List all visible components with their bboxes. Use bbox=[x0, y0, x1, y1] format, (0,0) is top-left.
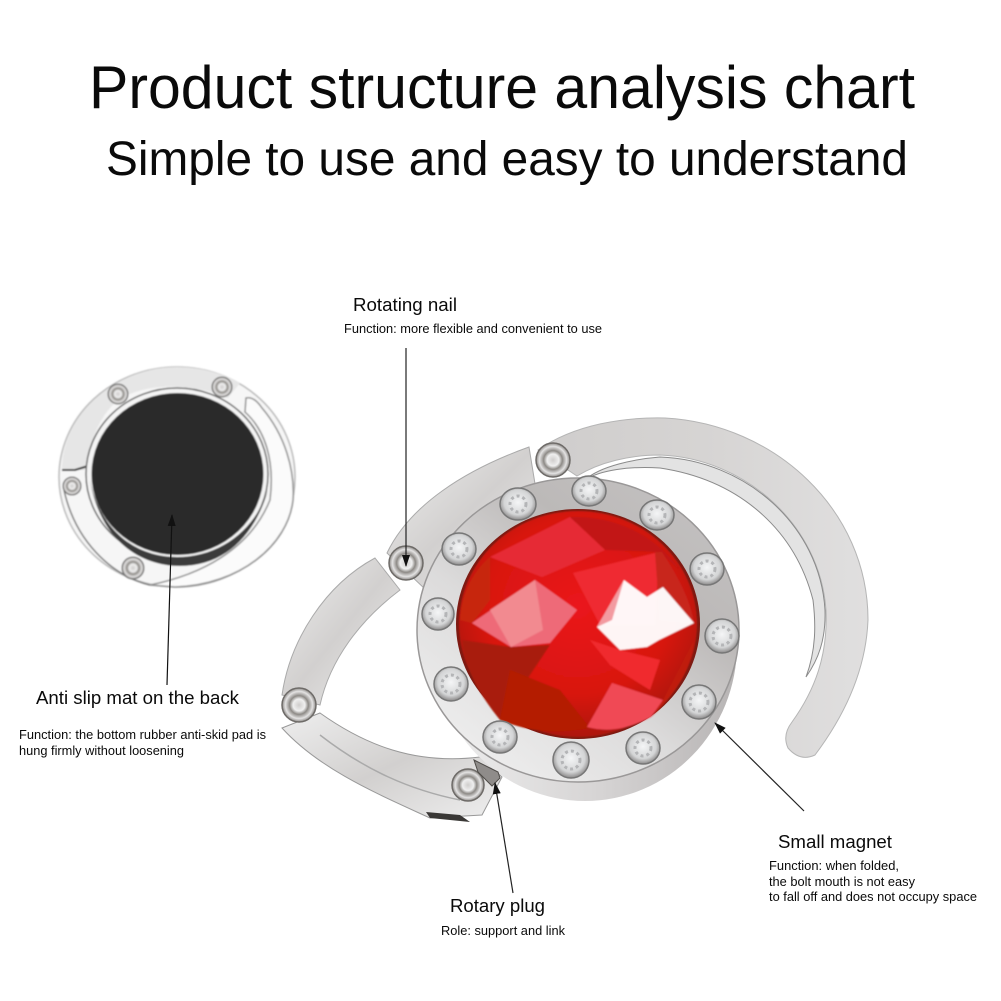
product image: back of closed hook bbox=[59, 367, 295, 587]
rhinestone facets bbox=[430, 483, 731, 769]
gem highlight bbox=[597, 580, 694, 650]
lower band bbox=[282, 713, 502, 818]
title: Product structure analysis chart bbox=[89, 54, 915, 121]
product image: open hook with red jewel bbox=[282, 418, 868, 822]
subtitle: Simple to use and easy to understand bbox=[106, 133, 908, 186]
arrow: rotating nail bbox=[405, 348, 407, 566]
label: rotating nail: Function: more flexible and convenient to use bbox=[344, 322, 602, 336]
label: anti slip mat: hung firmly without loosening bbox=[19, 744, 184, 758]
arrow: rotary plug bbox=[495, 783, 513, 893]
crescent inner side surface bbox=[585, 457, 825, 677]
jewel back body bbox=[433, 489, 737, 801]
arrow: small magnet bbox=[715, 723, 804, 811]
small hook rivets bbox=[63, 377, 232, 579]
arrow: anti slip mat bbox=[167, 515, 172, 685]
label: small magnet: Function: when folded, bbox=[769, 859, 899, 873]
label: small magnet: the bolt mouth is not easy bbox=[769, 875, 916, 889]
label: rotary plug bbox=[441, 896, 566, 938]
label: anti slip mat: Function: the bottom rubber anti-skid pad is bbox=[19, 728, 266, 742]
label: anti slip mat: Anti slip mat on the back bbox=[36, 688, 240, 708]
left loop bbox=[282, 558, 400, 705]
crescent arm bbox=[538, 418, 868, 757]
label: small magnet: Small magnet bbox=[778, 832, 892, 852]
red gem bbox=[459, 511, 697, 737]
label: rotating nail bbox=[344, 295, 602, 336]
label: rotary plug: Rotary plug bbox=[450, 896, 545, 916]
label: rotating nail: Rotating nail bbox=[353, 295, 457, 315]
label: anti slip mat bbox=[19, 688, 266, 758]
black anti-slip mat bbox=[92, 393, 264, 555]
jewel bezel bbox=[417, 478, 739, 782]
label: rotary plug: Role: support and link bbox=[441, 924, 566, 938]
upper band bbox=[387, 447, 536, 590]
rhinestones bbox=[422, 476, 739, 778]
label: small magnet: to fall off and does not occupy space bbox=[769, 890, 977, 904]
rotary plug barrel bbox=[474, 760, 500, 786]
label: small magnet bbox=[769, 832, 977, 904]
rivets bbox=[282, 443, 570, 801]
